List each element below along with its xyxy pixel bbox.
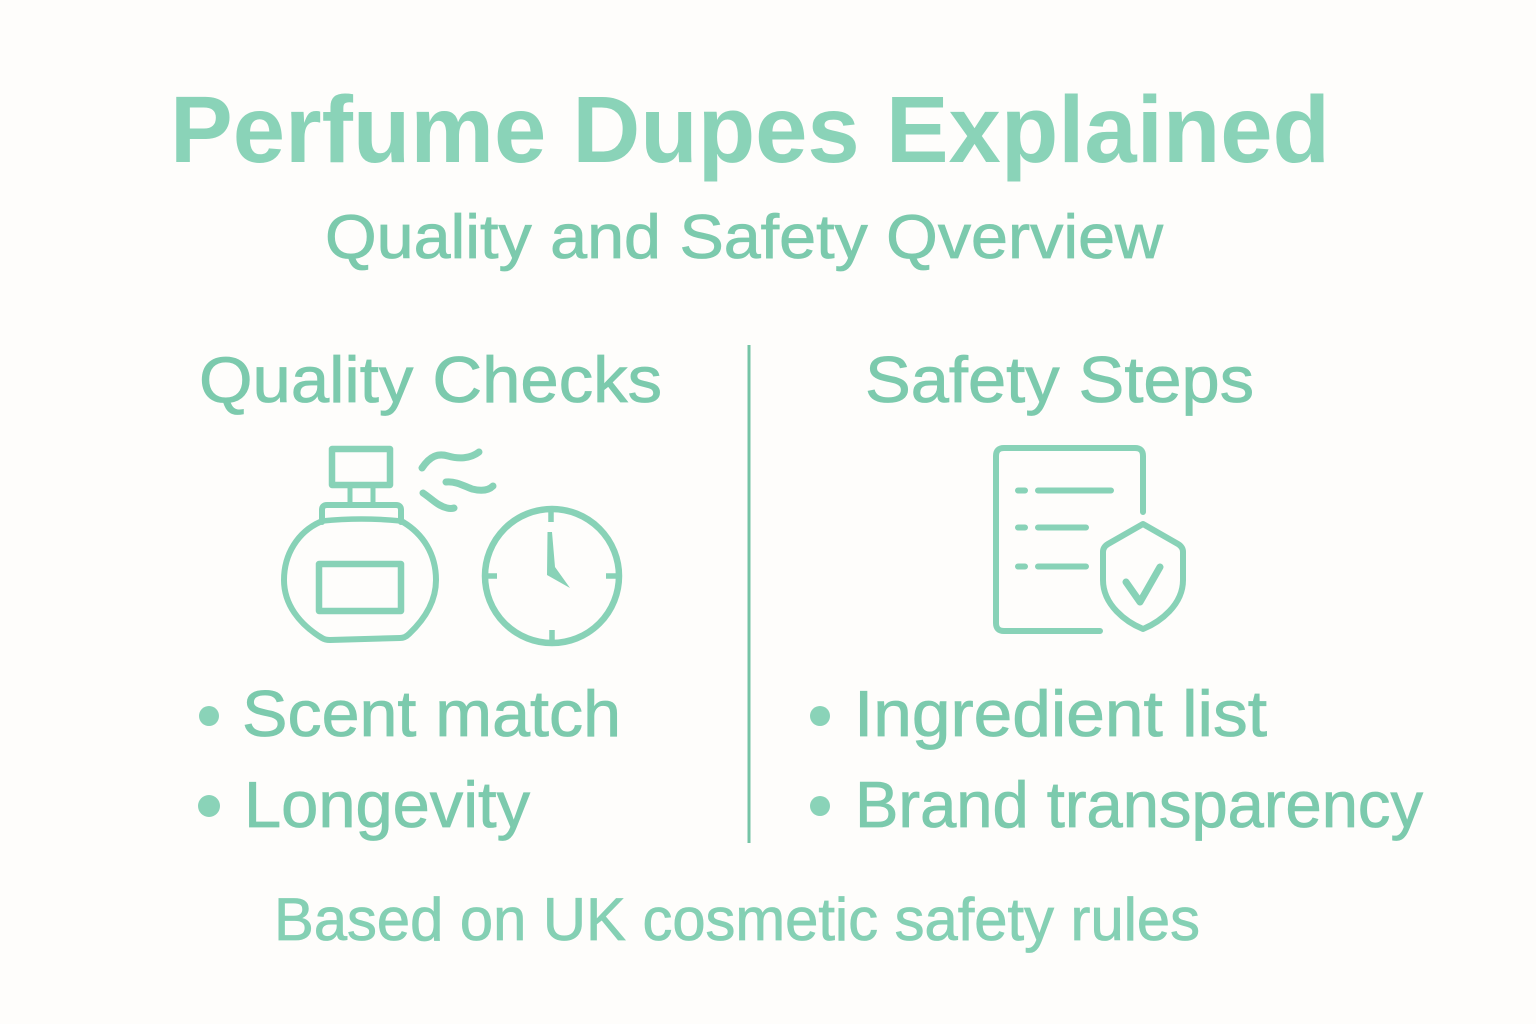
icon: document checklist <box>996 448 1143 631</box>
icon: safety shield with check <box>1103 524 1183 629</box>
footer note: Based on UK cosmetic safety rules <box>274 886 1200 953</box>
bullet: brand transparency: Brand transparency <box>855 768 1423 841</box>
bullet: scent match: Scent match <box>242 677 621 750</box>
icon: scent wisps <box>422 452 493 508</box>
icon: perfume bottle <box>284 449 436 640</box>
bullet: ingredient list: Ingredient list <box>854 677 1267 750</box>
panel: safety steps <box>810 343 1423 841</box>
title: Perfume Dupes Explained <box>170 77 1330 183</box>
bullet: longevity: Longevity <box>244 768 531 841</box>
panel: quality checks <box>198 343 662 841</box>
center divider <box>748 345 750 843</box>
icon: clock <box>485 509 619 643</box>
heading: safety steps: Safety Steps <box>865 343 1254 416</box>
subtitle: Quality and Safety Qverview <box>325 203 1163 272</box>
heading: quality checks: Quality Checks <box>199 343 662 416</box>
